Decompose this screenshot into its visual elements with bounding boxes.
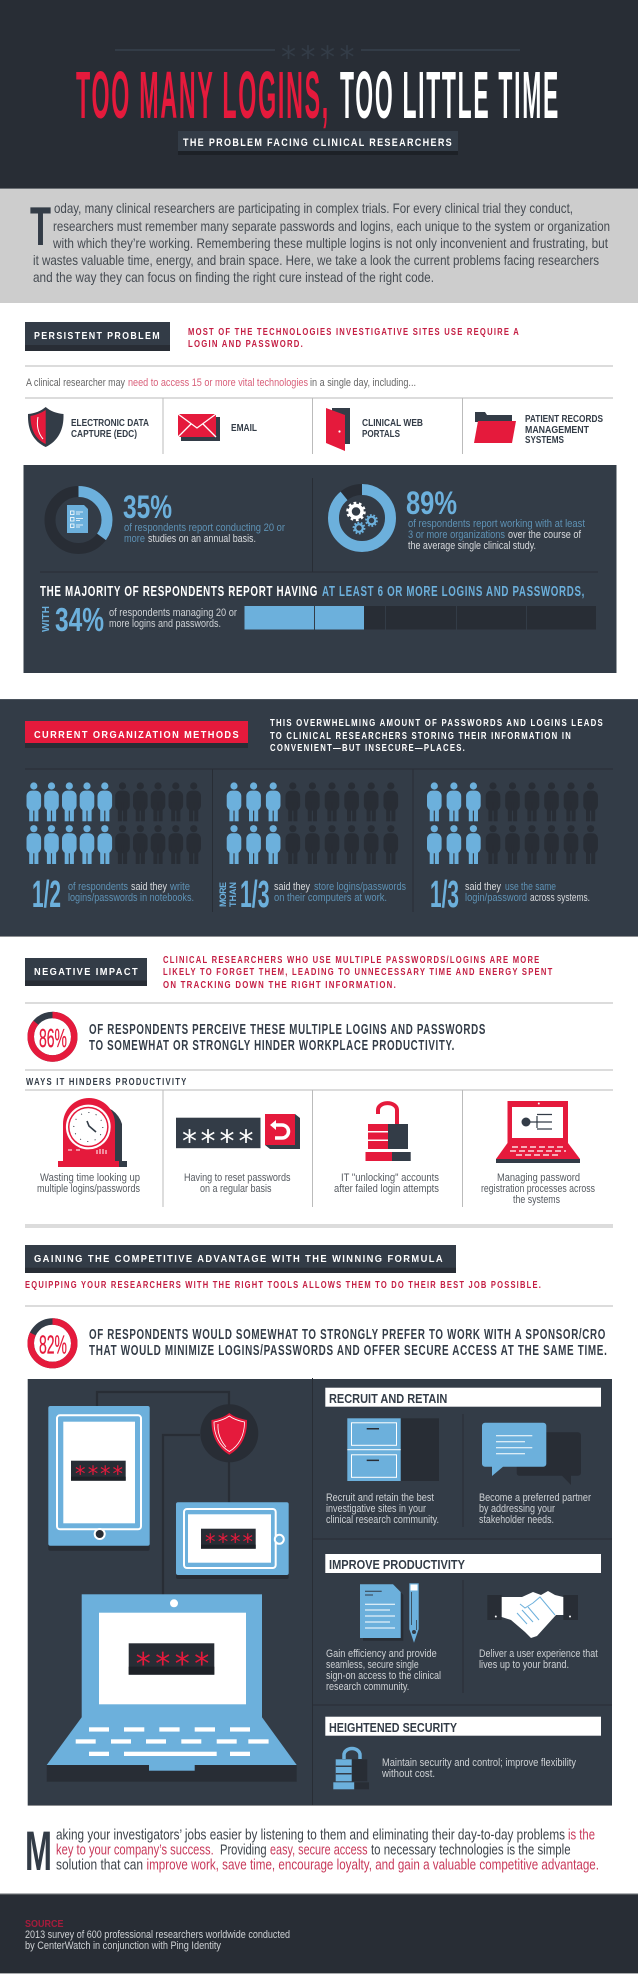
label: PATIENT RECORDS xyxy=(525,413,603,425)
technologies lead-in: in a single day, including... xyxy=(310,377,416,389)
caption: on a regular basis xyxy=(200,1183,272,1195)
ring chart: 86% xyxy=(31,1015,74,1058)
technology: electronic data capture xyxy=(28,407,149,447)
icon: small tablet xyxy=(176,1502,289,1579)
benefit group: heightened security xyxy=(325,1717,601,1789)
label: CAPTURE (EDC) xyxy=(71,428,137,440)
label: PORTALS xyxy=(362,428,400,440)
caption xyxy=(184,1172,291,1195)
section heading: competitive advantage xyxy=(25,1245,456,1273)
panel: current organization methods xyxy=(0,699,638,937)
description: said they xyxy=(274,881,310,893)
bar chart: 34% of five segments xyxy=(244,606,596,630)
benefit group: recruit and retain xyxy=(325,1388,601,1527)
icon: password reset: * xyxy=(238,1124,254,1159)
text: efficiency: sign-on access to the clinical xyxy=(326,1670,441,1682)
description: of respondents report conducting 20 or xyxy=(124,522,285,534)
label: SYSTEMS xyxy=(525,434,564,446)
fraction: 1/3: 1/3 xyxy=(430,874,459,916)
source text xyxy=(25,1929,290,1952)
description: write xyxy=(169,881,190,893)
section heading: negative impact: NEGATIVE IMPACT xyxy=(34,966,139,978)
organization summary: CONVENIENT—BUT INSECURE—PLACES. xyxy=(270,743,466,754)
technologies lead-in: A clinical researcher may xyxy=(26,377,125,389)
source text: 2013 survey of 600 professional researchers worldwide conducted xyxy=(25,1929,290,1941)
rotated label: with: WITH xyxy=(41,606,52,632)
device illustration xyxy=(47,1392,297,1782)
icon: large laptop xyxy=(47,1594,297,1782)
icon: password reset: * xyxy=(200,1124,216,1159)
icon: gears xyxy=(348,503,377,534)
hindrance: wasting time xyxy=(37,1098,140,1195)
description xyxy=(68,881,194,904)
method: computers at work xyxy=(218,782,406,916)
caption: Wasting time looking up xyxy=(40,1172,140,1184)
hindrance: reset passwords xyxy=(176,1114,300,1195)
closing text: to necessary technologies is the simple xyxy=(371,1842,571,1858)
description: said they xyxy=(131,881,167,893)
text: efficiency xyxy=(326,1648,441,1693)
description: store logins/passwords xyxy=(314,881,406,893)
headline xyxy=(89,1022,486,1054)
drop cap M: M xyxy=(25,1819,52,1882)
text: partner: Become a preferred partner xyxy=(479,1492,591,1504)
description: more xyxy=(124,533,145,545)
icon: large tablet: * xyxy=(75,1462,86,1486)
decorative stars: * xyxy=(320,40,335,75)
intro panel xyxy=(0,189,638,303)
majority headline: THE MAJORITY OF RESPONDENTS REPORT HAVING xyxy=(40,584,318,600)
hindrance: it unlocking xyxy=(334,1103,439,1195)
description: on their computers at work. xyxy=(274,892,387,904)
closing text xyxy=(56,1828,599,1874)
icon: clock xyxy=(58,1098,127,1167)
stat: 82 percent xyxy=(31,1322,608,1365)
header banner xyxy=(0,0,638,189)
description: more logins and passwords. xyxy=(109,618,221,630)
ring chart: 86%: 86% xyxy=(39,1023,67,1053)
label: MANAGEMENT xyxy=(525,424,589,436)
decorative stars: * xyxy=(300,40,316,75)
icon: small tablet: * xyxy=(205,1530,216,1554)
organization summary xyxy=(270,718,604,754)
text: brand: lives up to your brand. xyxy=(479,1659,569,1671)
section heading: current organization methods xyxy=(25,721,248,748)
source label: SOURCE xyxy=(25,1919,64,1930)
icon: document and pen xyxy=(360,1583,419,1643)
description: said they xyxy=(465,881,501,893)
value: 89%: 89% xyxy=(406,485,457,521)
label: CLINICAL WEB xyxy=(362,417,423,429)
text: recruit xyxy=(326,1492,439,1526)
text: security: Maintain security and control; improve flexibility xyxy=(382,1757,576,1769)
icon: small tablet: * xyxy=(230,1530,241,1554)
donut chart: 35% xyxy=(50,492,107,548)
value: 35%: 35% xyxy=(123,489,172,525)
decorative stars: * xyxy=(281,40,296,75)
headline xyxy=(89,1327,608,1359)
description xyxy=(465,881,590,904)
icon: folder xyxy=(474,412,516,443)
label xyxy=(525,413,603,446)
section heading: persistent problem xyxy=(25,322,170,351)
caption: Managing password xyxy=(497,1172,580,1184)
description: login/password xyxy=(465,892,527,904)
description: 3 or more organizations xyxy=(408,529,505,541)
description: of respondents xyxy=(68,881,128,893)
section heading: persistent problem: PERSISTENT PROBLEM xyxy=(34,330,161,342)
text: partner: by addressing your xyxy=(479,1503,555,1515)
caption xyxy=(37,1172,140,1195)
label xyxy=(362,417,423,440)
icon: large tablet: * xyxy=(88,1462,98,1486)
caption: after failed login attempts xyxy=(334,1183,439,1195)
caption xyxy=(334,1172,439,1195)
headline: TO SOMEWHAT OR STRONGLY HINDER WORKPLACE PRODUCTIVITY. xyxy=(89,1038,455,1054)
label: ELECTRONIC DATA xyxy=(71,417,149,429)
header bar xyxy=(325,1717,601,1736)
caption: multiple logins/passwords xyxy=(37,1183,140,1195)
rotated label: more than xyxy=(218,882,238,907)
description: across systems. xyxy=(530,892,590,904)
header bar xyxy=(325,1388,601,1407)
caption: registration processes across xyxy=(481,1183,595,1195)
description xyxy=(124,522,285,545)
persistent problem summary: MOST OF THE TECHNOLOGIES INVESTIGATIVE SITES USE REQUIRE A xyxy=(188,327,520,338)
connector lines xyxy=(97,1392,229,1595)
subtitle ribbon: THE PROBLEM FACING CLINICAL RESEARCHERS xyxy=(183,137,453,149)
donut chart: 89% xyxy=(334,490,390,546)
pictogram: 1 of 3 people xyxy=(227,782,398,864)
icon: door xyxy=(326,408,350,451)
label xyxy=(71,417,149,440)
fraction: 1/3: 1/3 xyxy=(240,874,270,916)
intro text xyxy=(33,200,610,285)
icon: envelope xyxy=(178,414,220,441)
caption: the systems xyxy=(513,1194,560,1206)
description: over the course of xyxy=(508,529,582,541)
description: of respondents report working with at least xyxy=(408,518,585,530)
caption xyxy=(481,1172,595,1206)
text: brand: Deliver a user experience that xyxy=(479,1648,598,1660)
icon: shield xyxy=(28,407,64,447)
value: 34%: 34% xyxy=(55,601,104,638)
icon: large tablet xyxy=(48,1406,150,1551)
intro text: and the way they can focus on finding the right cure instead of the right code. xyxy=(33,269,434,285)
description xyxy=(408,518,585,552)
caption: Having to reset passwords xyxy=(184,1172,291,1184)
icon: large tablet: * xyxy=(100,1462,111,1486)
icon: checklist xyxy=(67,505,88,533)
text: security: without cost. xyxy=(381,1768,435,1780)
technologies lead-in xyxy=(26,377,416,389)
label: EMAIL xyxy=(231,422,257,434)
icon: open padlock xyxy=(366,1103,411,1161)
ring chart: 82% xyxy=(31,1322,74,1365)
icon: small tablet: * xyxy=(242,1530,253,1554)
pictogram: 1 of 2 people xyxy=(26,782,201,864)
header bar xyxy=(325,1554,601,1573)
negative impact summary xyxy=(163,955,554,991)
text: recruit: clinical research community. xyxy=(326,1514,439,1526)
text: recruit: investigative sites in your xyxy=(326,1503,426,1515)
technology: clinical web portals xyxy=(326,408,423,451)
stat: 35 percent xyxy=(50,489,285,548)
icon: large tablet: * xyxy=(112,1462,123,1486)
text: efficiency: Gain efficiency and provide xyxy=(326,1648,437,1660)
stat: 34 percent xyxy=(41,601,596,638)
caption: IT "unlocking" accounts xyxy=(341,1172,439,1184)
icon: password reset xyxy=(176,1114,300,1159)
drop cap T: T xyxy=(30,195,51,257)
source text: by CenterWatch in conjunction with Ping Identity xyxy=(25,1940,221,1952)
ring chart: 82%: 82% xyxy=(39,1330,67,1360)
section heading: competitive advantage: GAINING THE COMPETITIVE ADVANTAGE WITH THE WINNING FORMULA xyxy=(34,1253,444,1265)
description: logins/passwords in notebooks. xyxy=(68,892,194,904)
technologies lead-in: need to access 15 or more vital technologies xyxy=(128,377,308,389)
rotated label: more than: THAN xyxy=(228,882,238,907)
subheading: ways it hinders productivity: WAYS IT HINDERS PRODUCTIVITY xyxy=(26,1077,188,1088)
description: studies on an annual basis. xyxy=(148,533,256,545)
section heading: current organization methods: CURRENT ORGANIZATION METHODS xyxy=(34,729,240,741)
description: the average single clinical study. xyxy=(408,540,536,552)
header bar: RECRUIT AND RETAIN xyxy=(329,1391,447,1406)
icon: small tablet: * xyxy=(218,1530,228,1554)
closing text: solution that can xyxy=(56,1858,143,1874)
header bar: IMPROVE PRODUCTIVITY xyxy=(329,1557,465,1572)
closing text: key to your company’s success. xyxy=(56,1842,214,1858)
subtitle ribbon xyxy=(178,131,458,155)
benefit group: improve productivity xyxy=(325,1554,601,1693)
rotated label: more than: MORE xyxy=(218,882,228,907)
closing text: is the xyxy=(568,1828,595,1844)
text: partner xyxy=(479,1492,591,1526)
icon: large laptop: * xyxy=(136,1647,151,1682)
icon: large laptop: * xyxy=(194,1647,209,1682)
hindrance: password registration xyxy=(481,1101,595,1206)
description xyxy=(109,607,237,630)
panel: winning formula xyxy=(28,1378,612,1806)
pictogram: 1 of 3 people xyxy=(427,782,598,864)
stat: 86 percent xyxy=(31,1015,486,1058)
method: notebooks xyxy=(26,782,201,916)
text: efficiency: research community. xyxy=(326,1681,409,1693)
text: recruit: Recruit and retain the best xyxy=(326,1492,434,1504)
method: same login xyxy=(427,782,598,916)
decorative stars xyxy=(281,40,354,75)
closing text: easy, secure access xyxy=(270,1842,368,1858)
icon: large laptop: * xyxy=(175,1647,190,1682)
icon: speech bubbles xyxy=(482,1423,581,1485)
technology: email xyxy=(178,414,257,441)
text: efficiency: seamless, secure single xyxy=(326,1659,419,1671)
technology: patient records xyxy=(474,412,603,446)
closing statement xyxy=(25,1819,599,1882)
stat: 89 percent xyxy=(334,485,585,552)
closing text: Providing xyxy=(220,1842,267,1858)
persistent problem summary: LOGIN AND PASSWORD. xyxy=(188,339,304,350)
text: security xyxy=(381,1757,576,1780)
icon: padlock xyxy=(333,1748,369,1789)
icon: security shield xyxy=(200,1404,258,1462)
description: use the same xyxy=(505,881,556,893)
icon: laptop xyxy=(496,1101,580,1163)
icon: filing cabinet xyxy=(347,1418,439,1481)
negative impact summary: ON TRACKING DOWN THE RIGHT INFORMATION. xyxy=(163,980,397,991)
icon: handshake xyxy=(487,1591,578,1638)
section heading: negative impact xyxy=(25,958,147,986)
description: of respondents managing 20 or xyxy=(109,607,237,619)
text: partner: stakeholder needs. xyxy=(479,1514,554,1526)
panel: respondent statistics xyxy=(24,465,616,673)
decorative stars: * xyxy=(340,40,354,75)
persistent problem summary xyxy=(188,327,520,350)
description xyxy=(274,881,406,904)
icon: password reset: * xyxy=(182,1124,197,1159)
footer xyxy=(0,1894,638,1974)
fraction: 1/2: 1/2 xyxy=(32,874,61,916)
header bar: HEIGHTENED SECURITY xyxy=(329,1720,457,1735)
icon: password reset: * xyxy=(220,1124,234,1159)
icon: large laptop: * xyxy=(155,1647,170,1682)
text: brand xyxy=(479,1648,598,1671)
